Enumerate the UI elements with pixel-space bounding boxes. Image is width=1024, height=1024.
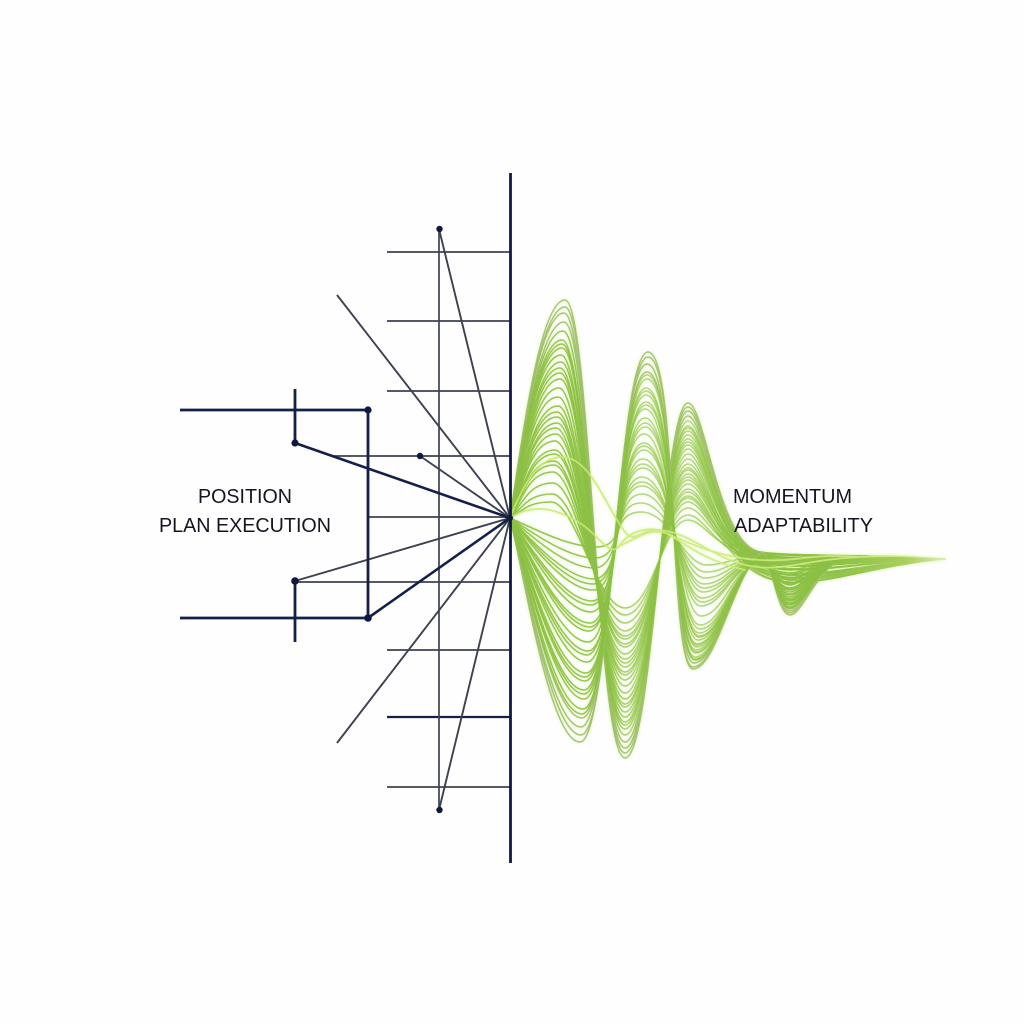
frame: bracket lines (180, 389, 368, 642)
right label: momentum, adaptability (733, 485, 873, 537)
left label: position, plan execution: PLAN EXECUTION (159, 514, 331, 537)
rays in heavy navy (295, 443, 510, 618)
left label: position, plan execution: POSITION (198, 485, 292, 508)
grid: horizontal ticks (295, 252, 510, 787)
right label: momentum, adaptability: ADAPTABILITY (734, 514, 873, 537)
green wave: momentum side (510, 300, 945, 758)
grid: vertical line (438, 229, 440, 810)
central axis (509, 173, 512, 863)
wave highlights: bright lime strands (510, 457, 945, 570)
left label: position, plan execution (159, 485, 331, 537)
wave family: strands peaking first (510, 300, 945, 758)
rays converging on the axis (295, 229, 510, 810)
wave family: strands dipping first (510, 352, 945, 742)
structure: position and plan side (180, 173, 513, 863)
right label: momentum, adaptability: MOMENTUM (733, 485, 852, 508)
node dots (291, 226, 513, 813)
